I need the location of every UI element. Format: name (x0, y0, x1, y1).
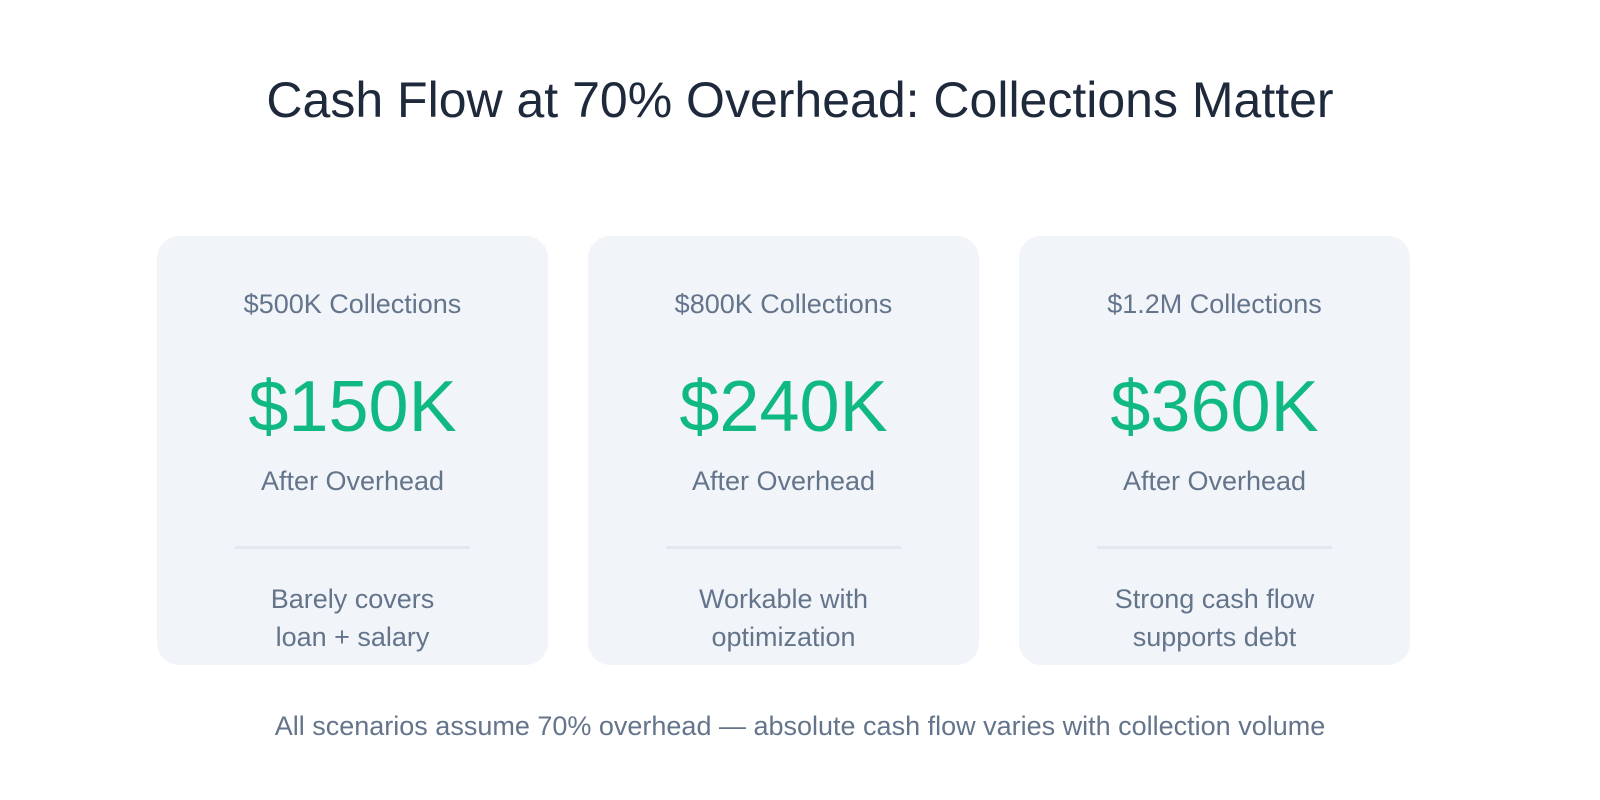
panel: $500K (157, 236, 548, 665)
description: Workable with (699, 584, 868, 614)
big number: $150K (248, 367, 457, 447)
footer note: All scenarios assume 70% overhead — absolute cash flow varies with collection volume (275, 711, 1325, 741)
panel: $800K (588, 236, 979, 665)
description: Barely covers (271, 584, 434, 614)
description (1115, 584, 1314, 652)
subtitle: After Overhead (1123, 466, 1306, 496)
description (271, 584, 434, 652)
big number: $360K (1110, 367, 1319, 447)
big number: $240K (679, 367, 888, 447)
description: optimization (711, 622, 856, 652)
description: loan + salary (276, 622, 429, 652)
description (699, 584, 868, 652)
title: Cash Flow at 70% Overhead: Collections Matter (266, 72, 1334, 128)
collections label: $1.2M Collections (1107, 289, 1322, 319)
subtitle: After Overhead (261, 466, 444, 496)
description: Strong cash flow (1115, 584, 1314, 614)
panel: $1.2M (1019, 236, 1410, 665)
subtitle: After Overhead (692, 466, 875, 496)
collections label: $800K Collections (675, 289, 892, 319)
collections label: $500K Collections (244, 289, 461, 319)
description: supports debt (1133, 622, 1296, 652)
